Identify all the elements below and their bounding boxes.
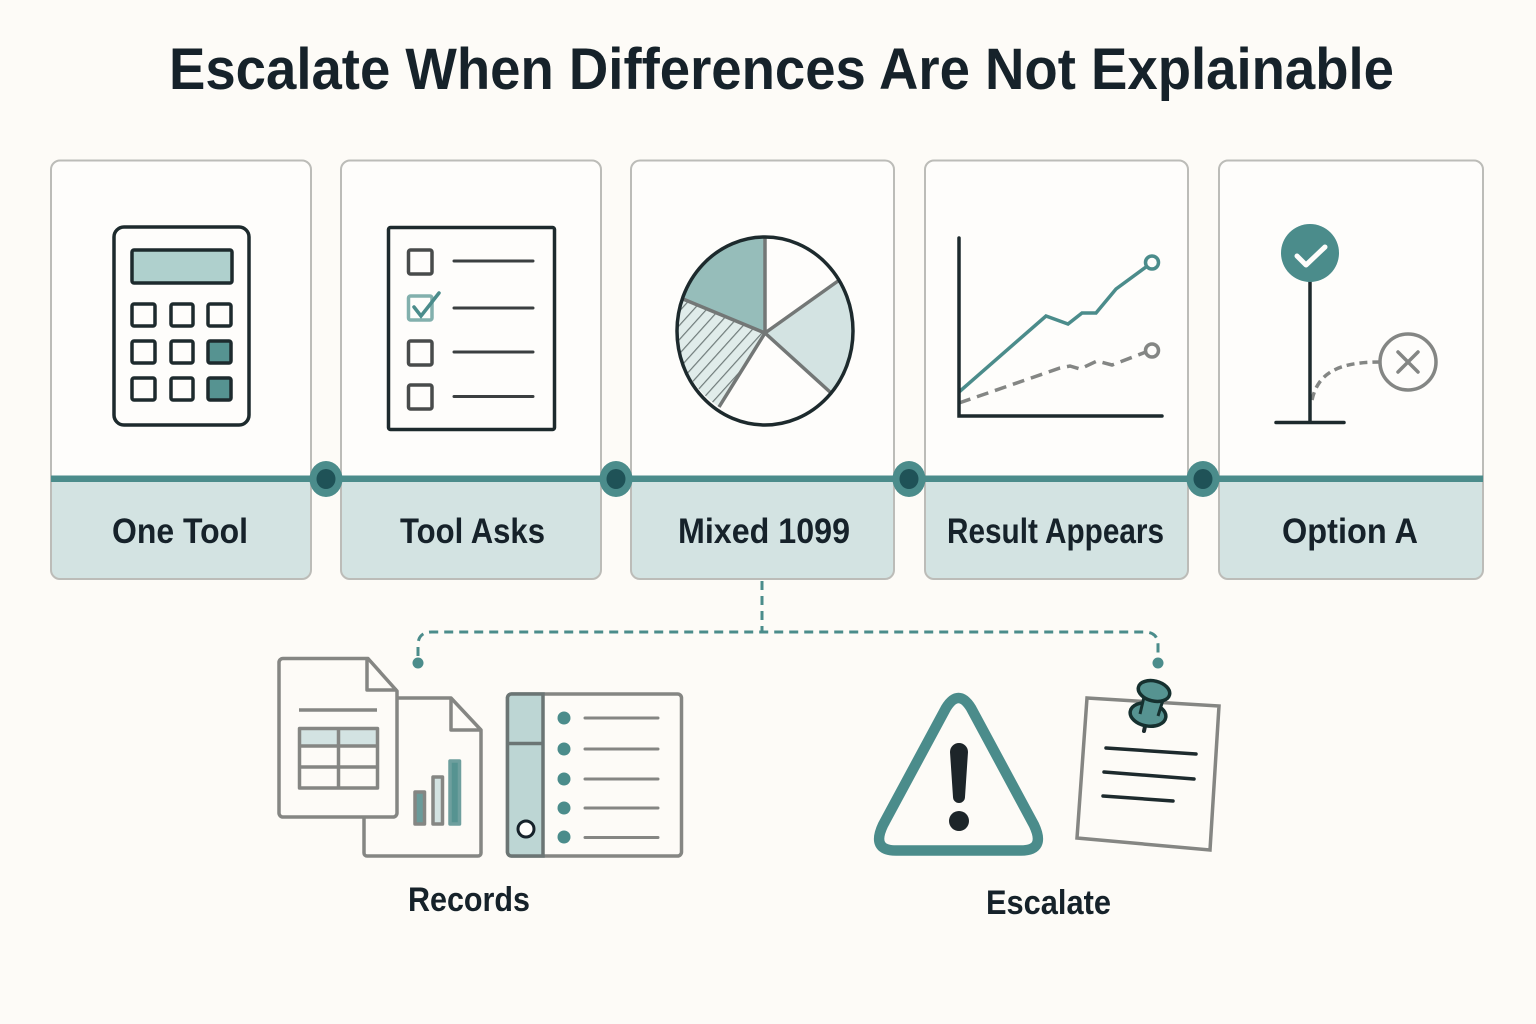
- label: Tool Asks: Tool Asks: [400, 512, 545, 551]
- panel: One Tool: [51, 160, 311, 579]
- timeline node 2: [600, 461, 632, 497]
- timeline node 3: [892, 461, 926, 497]
- panel: Result Appears: [925, 160, 1188, 579]
- panel: Tool Asks: [341, 160, 601, 579]
- panel: Option A: [1219, 160, 1483, 579]
- label: Result Appears: Result Appears: [947, 512, 1164, 551]
- label: One Tool: One Tool: [112, 512, 248, 551]
- icon: pinned note: [1077, 677, 1219, 850]
- chart: line chart: [959, 238, 1162, 416]
- chart: pie: [677, 237, 853, 425]
- icon: documents: [279, 658, 481, 856]
- title: Escalate When Differences Are Not Explainable: [169, 37, 1394, 102]
- timeline node 1: [310, 461, 342, 497]
- connector: dashed branch from Mixed 1099: [412, 581, 1164, 668]
- timeline node 4: [1186, 461, 1220, 497]
- icon: checklist: [388, 228, 554, 430]
- label: Records: Records: [408, 881, 530, 919]
- icon: calculator: [114, 227, 249, 425]
- icon: warning triangle: [879, 698, 1038, 850]
- label: Escalate: Escalate: [986, 884, 1111, 922]
- icon: binder: [508, 694, 682, 856]
- label: Mixed 1099: Mixed 1099: [678, 512, 850, 551]
- panel: Mixed 1099: [631, 160, 894, 579]
- icon: decision pin with rejected option: [1276, 224, 1436, 422]
- label: Option A: Option A: [1282, 512, 1418, 551]
